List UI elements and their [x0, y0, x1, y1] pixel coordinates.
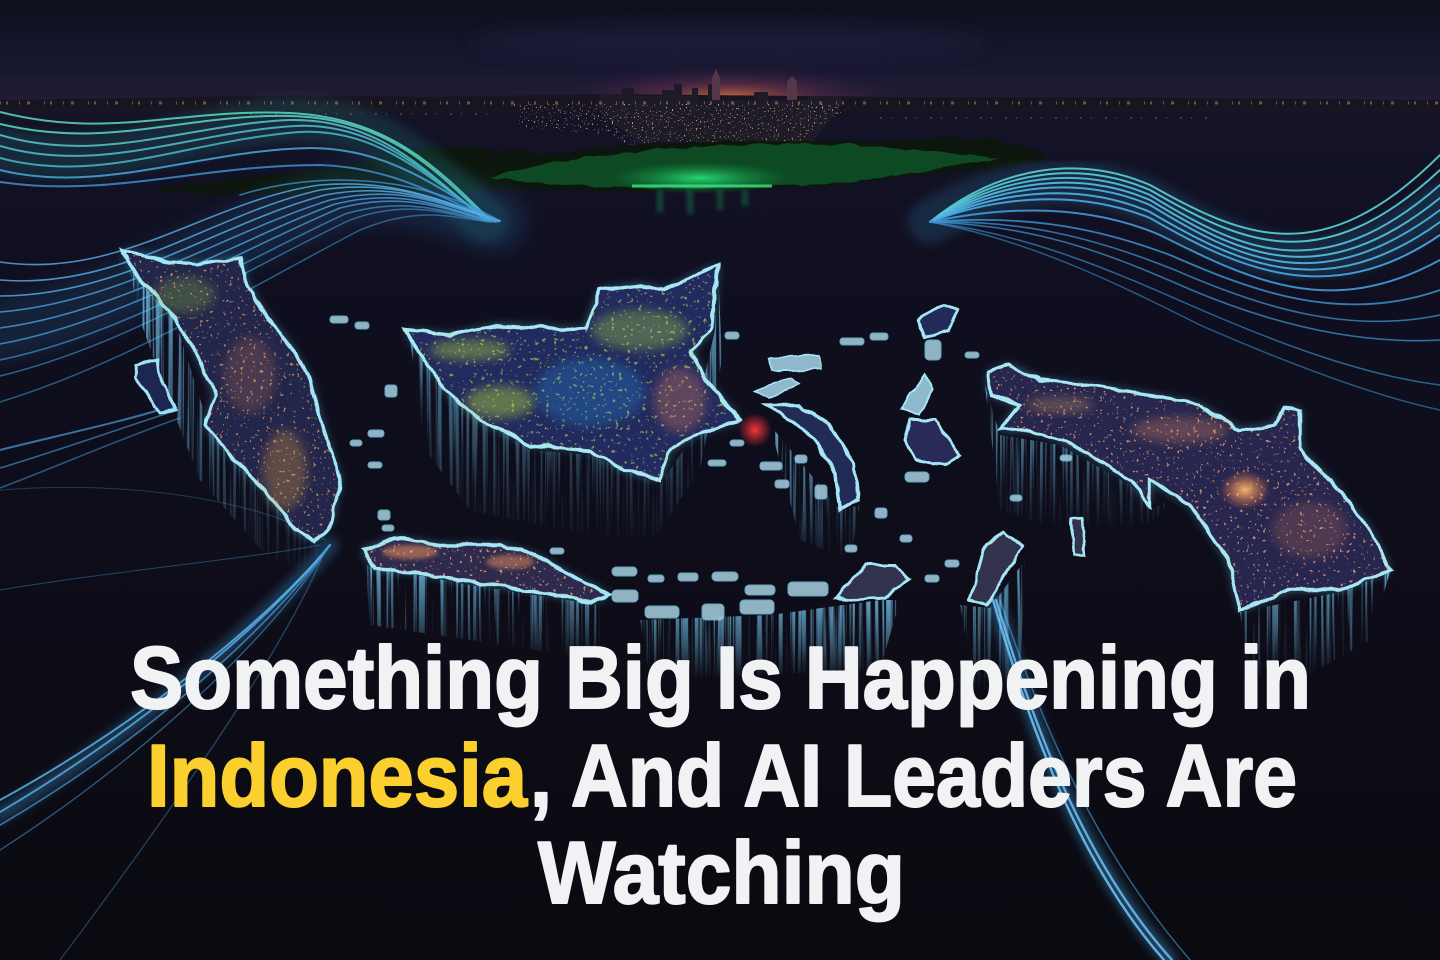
green island with lit shoreline: [150, 138, 1050, 214]
light streams: lower converging at Java: [0, 487, 1190, 960]
light curtains below islands: [130, 268, 1390, 690]
title highlight: Indonesia: Indonesia: [147, 726, 528, 825]
small scattered islets: [330, 316, 1072, 620]
glow: bright lights on Papua: [1219, 470, 1271, 510]
island: Sulawesi: [755, 356, 858, 510]
island: Java: [362, 538, 610, 602]
title line 1: Something Big Is Happening in: [130, 628, 1311, 727]
island: Halmahera group: [900, 305, 960, 465]
red hot spot at Makassar Strait: [738, 413, 772, 447]
island: Sumatra: [122, 250, 340, 542]
title: [130, 628, 1311, 922]
title line 2: , And AI Leaders Are: [530, 726, 1297, 825]
island city lights: [120, 250, 1395, 615]
light streams: upper left: [0, 112, 500, 488]
map of Indonesia: [120, 250, 1395, 690]
distant city skyline with lights: [0, 69, 1440, 152]
island: Borneo: [405, 265, 740, 480]
island: Nias: [134, 360, 175, 412]
island: Papua: [988, 365, 1390, 610]
title line 3: Watching: [538, 823, 905, 922]
island: Timor and Flores chain: [835, 518, 1085, 605]
light streams: right: [930, 155, 1440, 410]
